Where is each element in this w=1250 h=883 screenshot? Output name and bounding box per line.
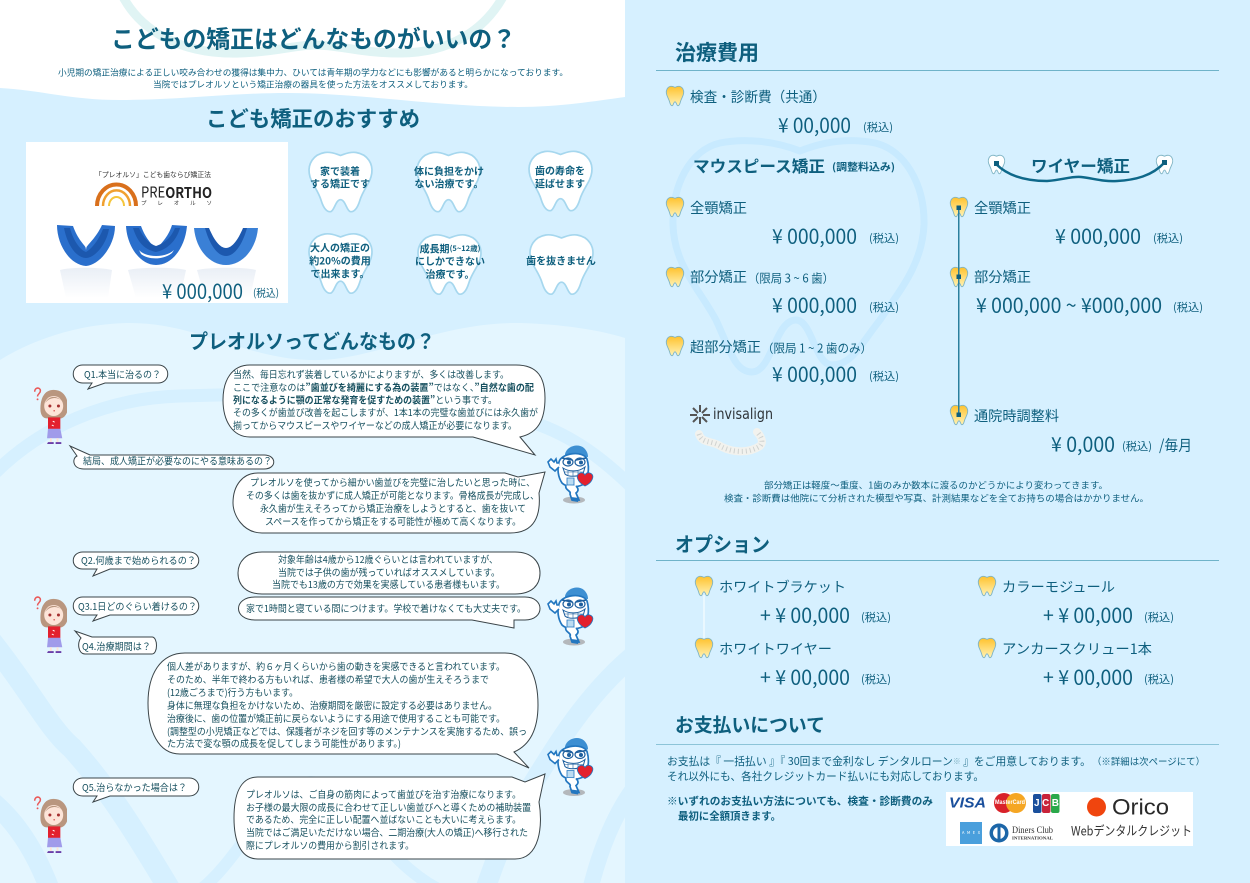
bubble: A4: そのため、半年で終わる方もいれば、患者様の希望で大人の歯が生えそろうまで — [167, 672, 489, 686]
panel: product photo: プレオルソ — [141, 199, 212, 207]
panel: payment logos: Diners Club — [1012, 825, 1053, 835]
option: anchor screw: + ¥ 00,000 — [1043, 662, 1133, 690]
heading: mouthpiece: (調整料込み) — [832, 158, 895, 174]
cost: wire partial — [974, 267, 1203, 318]
cost: mouthpiece minimal: ¥ 000,000 — [772, 358, 857, 388]
bubble: A3: 家で1時間と寝ている間につけます。学校で着けなくても大丈夫です。 — [246, 601, 526, 615]
heading: options: オプション — [675, 528, 770, 558]
panel: benefit teeth: 延ばせます — [535, 176, 585, 190]
bubble: A2: 対象年齢は4歳から12歳ぐらいとは言われていますが、 — [278, 552, 498, 566]
bubble: A1: 揃ってからマウスピースやワイヤーなどの成人矯正が必要になります。 — [233, 418, 517, 432]
cost: mouthpiece full: ¥ 000,000 — [772, 220, 857, 250]
bubble: Q1 — [73, 365, 168, 389]
bubble: A4: (12歳ごろまで)行う方もいます。 — [167, 685, 298, 699]
bubble: A1 follow-up — [233, 472, 545, 533]
bubble: A1 follow-up: その多くは歯を抜かずに成人矯正が可能となります。骨格成長が完成し、 — [246, 488, 539, 502]
panel: payment logos: Orico — [1112, 794, 1169, 820]
cost: wire full: ¥ 000,000 — [1055, 220, 1141, 250]
panel: benefit teeth: 約20%の費用 — [309, 252, 371, 268]
bubble: A1 — [223, 365, 545, 455]
panel: payment logos: VISA — [949, 794, 986, 812]
option: anchor screw: アンカースクリュー1本 — [1002, 639, 1152, 659]
cost: exam: ¥ 00,000 — [778, 110, 851, 138]
panel: benefit teeth: 歯を抜きません — [526, 252, 596, 268]
connector: white wire — [703, 595, 705, 639]
cost: mouthpiece minimal: (税込) — [869, 368, 899, 384]
bubble: A5: 当院ではご満足いただけない場合、二期治療(大人の矯正)へ移行された — [246, 825, 528, 839]
cost: mouthpiece minimal — [666, 336, 899, 388]
bubble: A1: 当然、毎日忘れず装着しているかによりますが、多くは改善します。 — [233, 367, 509, 381]
bubble: A1 follow-up: 永久歯が生えそろってから矯正治療をしようとすると、歯を抜いて — [260, 501, 526, 515]
notes: 検査・診断費は他院にて分析された模型や写真、計測結果などを全てお持ちの場合はかかりません。 — [724, 492, 1149, 504]
bubble: Q3: Q3.1日どのぐらい着けるの？ — [78, 599, 197, 613]
payment text: （※詳細は次ページにて） — [1092, 754, 1205, 768]
cost: mouthpiece full: (税込) — [869, 230, 899, 246]
bubble: A1: ここで注意なのは”歯並びを綺麗にする為の装置”ではなく、”自然な歯の配 — [233, 380, 534, 394]
cost: exam: 検査・診断費（共通） — [690, 87, 826, 107]
bubble: A4: 身体に無理な負担をかけないため、治療期間を厳密に設定する必要はありません。 — [167, 698, 497, 712]
cost: mouthpiece partial: (税込) — [869, 299, 899, 315]
panel: benefit teeth: にしかできない — [415, 253, 485, 268]
bubble: A1: その多くが歯並び改善を起こしますが、1本1本の完璧な歯並びには永久歯が — [233, 405, 538, 419]
cost: wire monthly: (税込) — [1122, 438, 1152, 454]
bubble: A4: た方法で変な顎の成長を促してしまう可能性があります。) — [167, 736, 401, 750]
payment text — [667, 753, 1205, 784]
bubble: Q1: Q1.本当に治るの？ — [84, 367, 161, 381]
intro text — [58, 66, 568, 90]
panel: payment logos — [946, 792, 1193, 846]
notes: 部分矯正は軽度～重度、1歯のみか数本に渡るのかどうかにより変わってきます。 — [764, 478, 1108, 492]
bubble: Q4 — [75, 631, 156, 654]
option: white bracket — [695, 576, 891, 628]
cost: wire partial: 部分矯正 — [974, 267, 1031, 287]
cost: wire monthly: ¥ 0,000 — [1051, 428, 1115, 458]
wire column connector — [950, 197, 968, 425]
bubble: Q4: Q4.治療期間は？ — [82, 639, 151, 653]
panel: benefit teeth: 成長期(5~12歳) — [420, 240, 481, 256]
cost: wire full — [974, 198, 1183, 250]
decorative tooth watermark — [673, 141, 924, 372]
background: right panel — [625, 0, 1250, 883]
heading: mouthpiece: マウスピース矯正 — [693, 153, 825, 177]
bubble: A5: であるため、完全に正しい配置へ並ばないことも大いに考えらます。 — [246, 812, 521, 826]
heading: mouthpiece — [693, 153, 895, 177]
bubble: A5: プレオルソは、ご自身の筋肉によって歯並びを治す治療になります。 — [246, 787, 521, 801]
panel: benefit teeth: 家で装着 — [320, 163, 360, 178]
heading: what is preortho: プレオルソってどんなもの？ — [189, 326, 435, 354]
cost: mouthpiece full — [666, 197, 899, 250]
bubble: A1: 列になるように顎の正常な発育を促すための装置”という事です。 — [233, 392, 497, 406]
heading: treatment cost: 治療費用 — [675, 37, 759, 67]
bubble: A4: 個人差がありますが、約６ヶ月くらいから歯の動きを実感できると言われています。 — [167, 659, 505, 673]
bubble: A4: 治療後に、歯の位置が矯正前に戻らないようにする用途で使用することも可能です。 — [167, 711, 505, 725]
icon: mascot 3 — [548, 738, 593, 796]
panel: product photo: PREORTHO — [141, 182, 212, 202]
intro text: 小児期の矯正治療による正しい咬み合わせの獲得は集中力、ひいては青年期の学力などにも影響があると明らかになっております。 — [58, 66, 568, 78]
bubble: A1 follow-up: プレオルソを使ってから細かい歯並びを完璧に治したいと思った時に、 — [250, 475, 535, 489]
panel: payment logos: MasterCard — [995, 800, 1025, 806]
cost: mouthpiece partial: （限局 3 ~ 6 歯） — [748, 270, 834, 286]
logo: invisalign — [690, 405, 773, 451]
panel: product photo — [26, 142, 288, 304]
bubble: A2 — [238, 552, 540, 594]
cost: exam — [666, 86, 893, 138]
bubble: Q5: Q5.治らなかった場合は？ — [82, 780, 187, 794]
cost: mouthpiece full: 全顎矯正 — [690, 198, 747, 218]
bubble: A1 follow-up: スペースを作ってから矯正をする可能性が極めて高くなります。 — [265, 514, 521, 528]
bubble: Q3 — [73, 597, 199, 621]
option: white wire — [695, 638, 891, 690]
intro text: 当院ではプレオルソという矯正治療の器具を使った方法をオススメしております。 — [153, 78, 473, 90]
cost: wire full: (税込) — [1153, 230, 1183, 246]
panel: benefit teeth: 歯の寿命を — [535, 162, 585, 178]
payment note: 最初に全額頂きます。 — [678, 808, 781, 824]
payment text: お支払は『 一括払い 』『 30回まで金利なし デンタルローン※ 』をご用意しております。 — [667, 753, 1091, 769]
option: colour module: (税込) — [1144, 609, 1174, 625]
payment note: ※いずれのお支払い方法についても、検査・診断費のみ — [667, 794, 933, 808]
cost: mouthpiece partial: 部分矯正 — [690, 267, 747, 287]
cost: wire full: 全顎矯正 — [974, 198, 1031, 218]
icon: mascot 1 — [548, 446, 593, 504]
option: white bracket: ホワイトブラケット — [719, 577, 846, 597]
panel: benefit teeth: する矯正です — [310, 176, 370, 190]
title: こどもの矯正はどんなものがいいの？ — [111, 20, 516, 54]
heading: wire: ワイヤー矯正 — [1031, 153, 1130, 177]
cost: mouthpiece partial: ¥ 000,000 — [772, 290, 857, 318]
cost: wire monthly: /毎月 — [1159, 434, 1192, 456]
option: white bracket: (税込) — [861, 609, 891, 625]
payment text: それ以外にも、各社クレジットカード払いにも対応しております。 — [667, 768, 984, 784]
bubble: Q2 — [73, 552, 199, 576]
bubble: Q5 — [73, 778, 199, 802]
option: anchor screw: (税込) — [1144, 671, 1174, 687]
bubble: A2: 当院では子供の歯が残っていればオススメしています。 — [278, 565, 500, 579]
bubble: Q1 follow-up — [70, 446, 274, 469]
panel: product photo: 「プレオルソ」こども歯ならび矯正法 — [95, 170, 211, 180]
panel: payment logos: INTERNATIONAL — [1012, 836, 1053, 840]
panel: payment logos: AMEX — [962, 830, 981, 836]
icon: girl 3 — [35, 797, 68, 853]
cost: wire monthly — [974, 406, 1192, 458]
cost: mouthpiece minimal: （限局 1 ~ 2 歯のみ） — [762, 340, 872, 356]
notes — [724, 478, 1149, 504]
icon: girl 1 — [35, 388, 68, 444]
panel: benefit teeth: ない治療です。 — [414, 176, 484, 190]
heading: wire — [988, 153, 1173, 181]
cost: wire monthly: 通院時調整料 — [974, 406, 1059, 426]
bubble: A2: 当院でも13歳の方で効果を実感している患者様もいます。 — [272, 577, 505, 591]
bubble: A5: お子様の最大限の成長に合わせて正しい歯並びへと導くための補助装置 — [246, 800, 531, 814]
option: colour module: カラーモジュール — [1002, 577, 1115, 597]
logo: invisalign: invisalign — [713, 405, 773, 423]
option: anchor screw — [978, 638, 1174, 690]
product price: (税込) — [253, 286, 279, 300]
panel: payment logos: Webデンタルクレジット — [1071, 820, 1192, 840]
panel: benefit teeth — [309, 151, 596, 294]
panel: benefit teeth: 体に負担をかけ — [414, 163, 484, 178]
option: white wire: ホワイトワイヤー — [719, 639, 832, 659]
cost: wire partial: (税込) — [1173, 299, 1203, 315]
background: left panel — [0, 0, 640, 883]
panel: benefit teeth: 治療です。 — [426, 266, 474, 281]
option: white wire: + ¥ 00,000 — [760, 662, 850, 690]
cost: wire partial: ¥ 000,000 ~ ¥000,000 — [976, 290, 1162, 318]
icon: mascot 2 — [548, 588, 593, 646]
panel: benefit teeth: で出来ます。 — [310, 266, 370, 280]
cost: mouthpiece partial — [666, 267, 899, 318]
option: white wire: (税込) — [861, 671, 891, 687]
panel: benefit teeth: 大人の矯正の — [310, 240, 370, 254]
panel: payment logos: JCB — [1034, 798, 1059, 809]
heading: recommendation: こども矯正のおすすめ — [206, 102, 420, 134]
bubble: A4 — [148, 653, 538, 768]
bubble: A3 — [238, 597, 540, 628]
option: colour module: + ¥ 00,000 — [1043, 600, 1133, 628]
bubble: A4: (調整型の小児矯正などでは、保護者がネジを回す等のメンテナンスを実施するため、誤っ — [167, 724, 527, 738]
icon: girl 2 — [35, 597, 68, 653]
option: white bracket: + ¥ 00,000 — [760, 600, 850, 628]
option: colour module — [978, 576, 1174, 628]
payment note — [667, 794, 933, 824]
cost: mouthpiece minimal: 超部分矯正 — [690, 337, 761, 357]
product price: ¥ 000,000 — [162, 276, 243, 304]
bubble: Q1 follow-up: 結局、成人矯正が必要なのにやる意味あるの？ — [83, 454, 272, 468]
bubble: Q2: Q2.何歳まで始められるの？ — [81, 553, 196, 567]
heading: payment: お支払いについて — [675, 710, 825, 738]
cost: exam: (税込) — [863, 119, 893, 135]
bubble: A5 — [234, 774, 545, 859]
bubble: A5: 際にプレオルソの費用から割引されます。 — [246, 838, 414, 852]
